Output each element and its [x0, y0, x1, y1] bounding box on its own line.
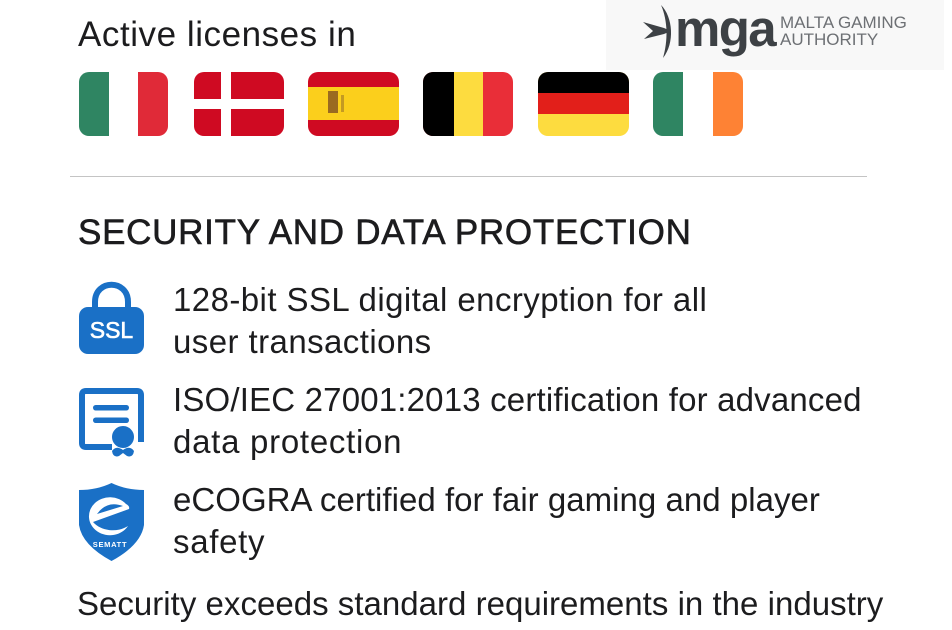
- text: SSL encryption: user transactions: [173, 323, 432, 360]
- heading: security and data protection: SECURITY AND DATA PROTECTION: [78, 213, 692, 252]
- logo wordmark: mga: [675, 0, 775, 57]
- flag: Italy: [79, 72, 168, 136]
- icon: certificate: [79, 388, 144, 456]
- icon: eCOGRA shield: [79, 483, 144, 561]
- flag: Denmark: [194, 72, 284, 136]
- icon: MGA bird emblem: [643, 5, 671, 58]
- text: eCOGRA certification: [173, 481, 820, 560]
- text: SSL encryption: [173, 281, 707, 360]
- heading: active licenses: Active licenses in: [78, 15, 356, 54]
- icon: SSL padlock: [79, 282, 144, 354]
- closing statement: Security exceeds standard requirements in the industry: [77, 585, 883, 622]
- logo text: MALTA GAMING: [780, 13, 907, 32]
- text: eCOGRA certification: eCOGRA certified for fair gaming and player: [173, 481, 820, 518]
- text: ISO certification: ISO/IEC 27001:2013 certification for advanced: [173, 381, 862, 418]
- flag: Spain: [308, 72, 399, 136]
- logo text: [780, 13, 907, 49]
- icon: eCOGRA shield: SEMATT: [93, 540, 127, 549]
- logo panel: Malta Gaming Authority: [606, 0, 944, 70]
- text: SSL encryption: 128-bit SSL digital encryption for all: [173, 281, 707, 318]
- logo text: AUTHORITY: [780, 30, 878, 49]
- text: eCOGRA certification: safety: [173, 523, 265, 560]
- flag: Ireland: [653, 72, 743, 136]
- text: ISO certification: [173, 381, 862, 460]
- icon: SSL padlock: SSL: [90, 317, 133, 343]
- flag: Germany: [538, 72, 629, 136]
- flag: Belgium: [423, 72, 513, 136]
- text: ISO certification: data protection: [173, 423, 402, 460]
